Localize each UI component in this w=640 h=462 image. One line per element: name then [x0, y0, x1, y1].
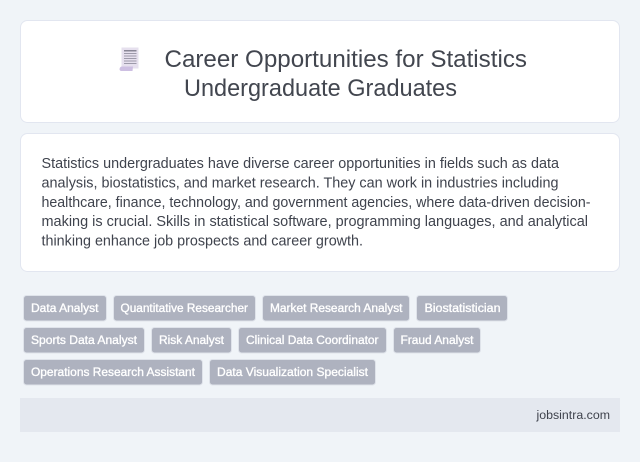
- tag: Biostatistician: [416, 296, 508, 321]
- tags: career roles: [24, 296, 508, 385]
- text block: description: thinking enhance job prospects and career growth.: [42, 234, 363, 250]
- footer source text: jobsintra.com: [535, 408, 610, 422]
- title: Career Opportunities for Statistics: [164, 46, 527, 73]
- tag: Market Research Analyst: Market Research Analyst: [270, 301, 403, 315]
- tag: Fraud Analyst: [394, 328, 480, 353]
- text block: description: [42, 156, 591, 250]
- tag: Risk Analyst: Risk Analyst: [159, 333, 225, 347]
- tag: Sports Data Analyst: [24, 328, 144, 353]
- tag: Clinical Data Coordinator: [238, 328, 386, 353]
- title: [164, 46, 527, 102]
- tag: Clinical Data Coordinator: Clinical Data Coordinator: [246, 333, 378, 347]
- tag: Operations Research Assistant: Operations Research Assistant: [31, 365, 196, 379]
- tag: Data Analyst: Data Analyst: [31, 301, 99, 315]
- panel: title card: [20, 20, 620, 122]
- text block: description: analysis, biostatistics, and market research. They can work in industries including: [42, 176, 558, 192]
- tag: Data Visualization Specialist: Data Visualization Specialist: [217, 365, 369, 379]
- tag: Risk Analyst: [152, 328, 232, 353]
- tag: Data Visualization Specialist: [210, 360, 376, 385]
- text block: description: healthcare, finance, technology, and government agencies, where data-driven decision-: [42, 195, 591, 211]
- tag: Fraud Analyst: Fraud Analyst: [400, 333, 474, 347]
- tag: Operations Research Assistant: [24, 360, 202, 385]
- text block: description: Statistics undergraduates have diverse career opportunities in fields such as data: [42, 156, 560, 172]
- tag: Data Analyst: [24, 296, 106, 321]
- tag: Quantitative Researcher: [114, 296, 256, 321]
- title: Undergraduate Graduates: [184, 75, 457, 102]
- tag: Market Research Analyst: [262, 296, 410, 321]
- tag: Biostatistician: Biostatistician: [424, 301, 500, 315]
- tag: Quantitative Researcher: Quantitative Researcher: [120, 301, 248, 315]
- footer: [20, 398, 620, 432]
- text block: description: making is crucial. Skills in statistical software, programming languages, and analytical: [42, 214, 588, 230]
- tag: Sports Data Analyst: Sports Data Analyst: [31, 333, 138, 347]
- panel: description: [20, 134, 620, 272]
- icon: document scroll: [120, 48, 138, 71]
